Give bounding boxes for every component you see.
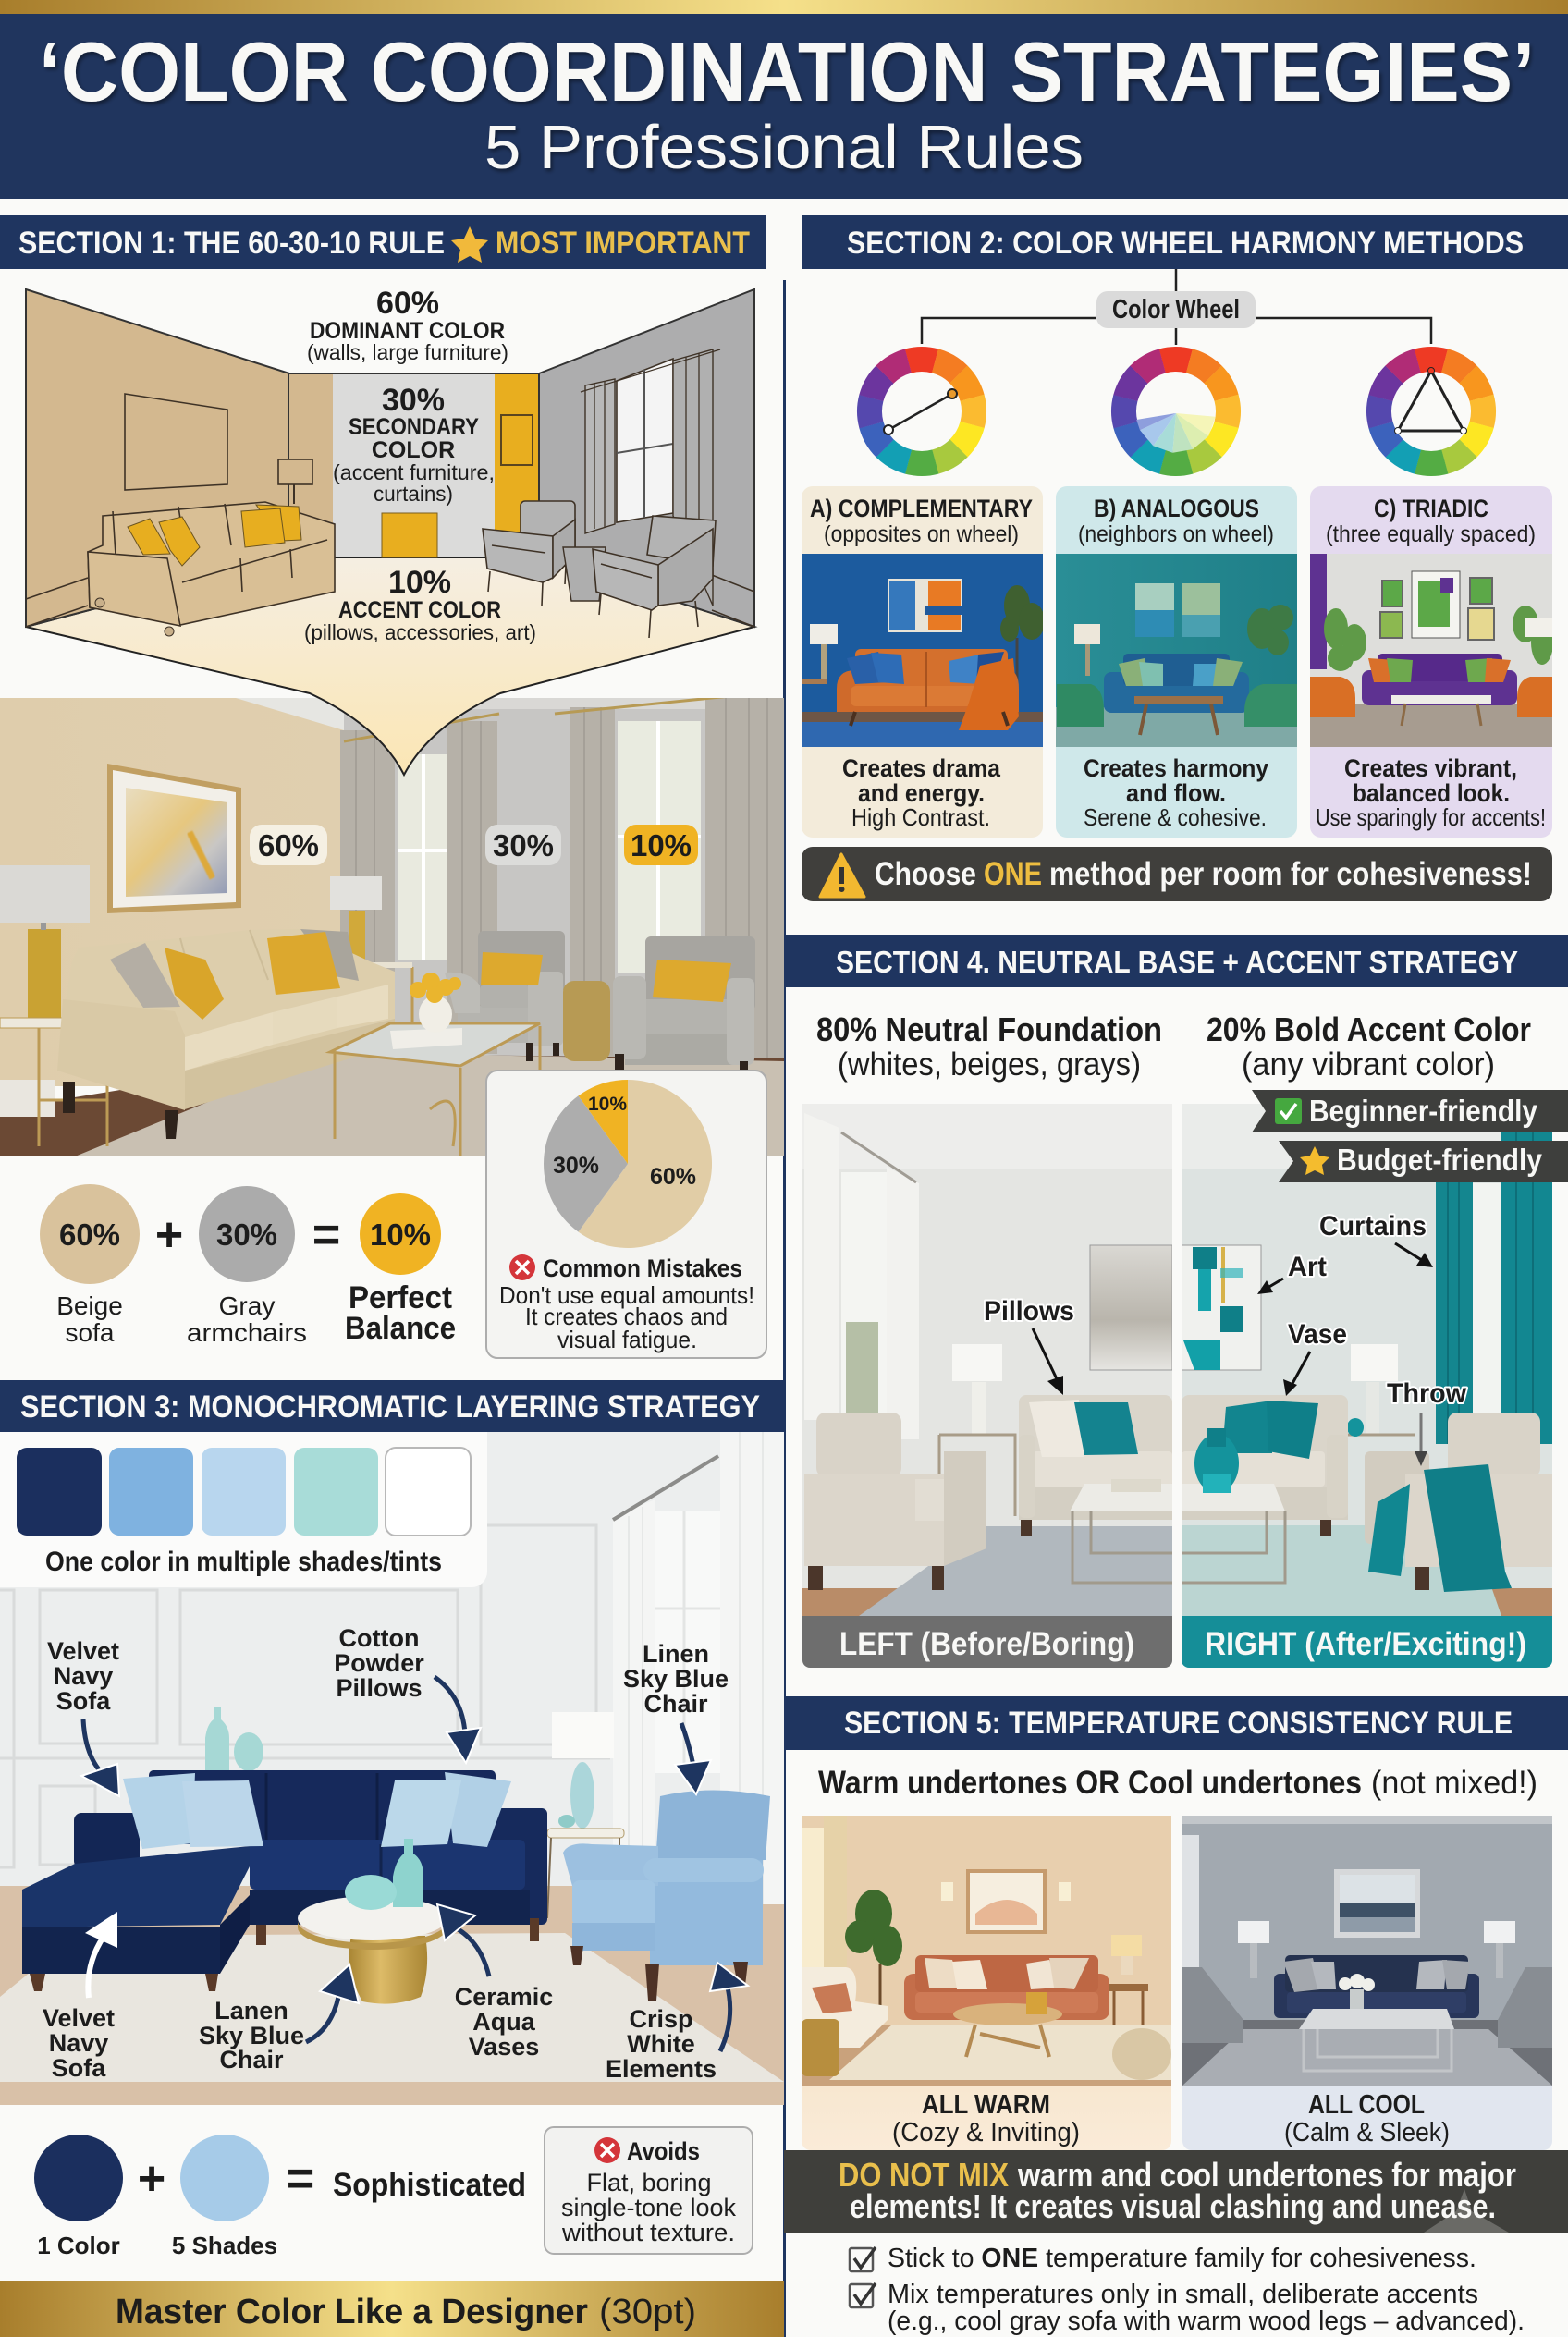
10% text: (pillows, accessories, art) (304, 620, 536, 644)
panel: monochromatic room photo (0, 1432, 784, 2105)
callout labels with arrows: Elements (606, 2055, 717, 2083)
after coffee table (1182, 1484, 1285, 1583)
callout labels with arrows: White (627, 2030, 695, 2058)
photo labels: 10% (631, 828, 692, 863)
photo labels: 30% (493, 828, 554, 863)
text: 80 / 20 split: (whites, beiges, grays) (838, 1046, 1141, 1083)
panel: C triadic: Creates vibrant, (1344, 754, 1517, 782)
color wheel tree (922, 269, 1431, 345)
panel: C triadic (1310, 486, 1553, 838)
panel: all cool (1182, 1816, 1552, 2150)
wall art (107, 764, 241, 913)
callout labels with arrows: Velvet (47, 1637, 119, 1665)
60% text: 60% (376, 286, 439, 321)
equation: one color plus shades: + (138, 2152, 165, 2206)
blue armchair (563, 1790, 770, 2001)
equation: 60 + 30 = 10: Gray (219, 1291, 275, 1320)
panel: A complementary: Creates drama (842, 754, 1001, 782)
panel: all cool: ALL COOL (1308, 2090, 1425, 2120)
text: 80 / 20 split: 20% Bold Accent Color (1207, 1010, 1531, 1048)
line-art armchairs (483, 501, 716, 638)
ribbon: budget-friendly (1279, 1141, 1568, 1182)
callout: avoids (545, 2127, 753, 2254)
line-art window and curtains (581, 349, 720, 606)
30% text: SECONDARY (349, 414, 479, 440)
10% text (304, 565, 536, 644)
checklist (850, 2244, 1525, 2336)
callout: avoids: Avoids (627, 2137, 700, 2165)
text: warm or cool: Warm undertones OR Cool undertones (818, 1765, 1362, 1801)
60% text: DOMINANT COLOR (310, 318, 505, 344)
divider between columns (783, 280, 786, 2337)
panel: swatches: One color in multiple shades/tints (45, 1547, 442, 1577)
10% text: ACCENT COLOR (338, 597, 501, 623)
panel: A complementary: A) COMPLEMENTARY (810, 495, 1033, 522)
callouts: accent labels (1257, 1211, 1467, 1466)
photo: warm room (802, 1816, 1171, 2086)
panel: all warm: (Cozy & Inviting) (892, 2118, 1080, 2147)
equation: 60 + 30 = 10: sofa (66, 1318, 115, 1347)
icon: star (1300, 1146, 1329, 1175)
panel: B analogous (1056, 486, 1297, 838)
equation: 60 + 30 = 10: Perfect (349, 1280, 452, 1315)
ribbon: beginner-friendly (1252, 1090, 1568, 1132)
equation: one color plus shades: Sophisticated (333, 2167, 526, 2203)
equation: one color plus shades: 5 Shades (172, 2232, 277, 2259)
footer banner (0, 2281, 784, 2337)
ribbon: budget-friendly: Budget-friendly (1337, 1143, 1543, 1177)
equation: 60 + 30 = 10: Beige (56, 1291, 123, 1320)
icon: complementary wheel (848, 337, 996, 485)
text: 80 / 20 split: 80% Neutral Foundation (816, 1010, 1162, 1048)
panel: section 5 heading (784, 1696, 1568, 1750)
text: 80 / 20 split: (any vibrant color) (1242, 1046, 1495, 1083)
table lamp (547, 1712, 624, 1918)
photo labels: 60% (258, 828, 319, 863)
panel: section 3 heading (0, 1380, 784, 1432)
callout labels with arrows: Sky Blue (623, 1665, 729, 1693)
footer banner: Master Color Like a Designer (116, 2293, 588, 2331)
callout: pillows: Pillows (984, 1296, 1074, 1327)
panel: section 1 heading: MOST IMPORTANT (496, 226, 750, 261)
before side table lamp (939, 1344, 1015, 1516)
icon: checkbox (850, 2247, 876, 2271)
callout labels with arrows: Lanen (214, 1997, 288, 2025)
callout: pie chart and common mistakes: Don't use equal amounts! (499, 1281, 754, 1309)
equation: one color plus shades: 1 Color (37, 2232, 120, 2259)
callout: avoids: single-tone look (561, 2194, 736, 2221)
pie chart: 10% (588, 1094, 627, 1115)
equation: 60 + 30 = 10: + (155, 1208, 183, 1262)
panel: after photo teal accents: RIGHT (After/Exciting!) (1205, 1626, 1526, 1662)
panel: A complementary: and energy. (858, 779, 985, 807)
coffee table with flowers (330, 973, 540, 1156)
checklist: Mix temperatures only in small, deliberate accents (888, 2280, 1478, 2309)
before coffee table (1070, 1479, 1172, 1583)
icon: warning triangle (820, 854, 864, 897)
panel: B analogous: and flow. (1126, 779, 1226, 807)
callout labels with arrows: Velvet (43, 2004, 115, 2032)
30% text: (accent furniture, (333, 460, 495, 484)
header banner (0, 0, 1568, 199)
panel: swatches (0, 1432, 487, 1587)
30% text: 30% (382, 383, 445, 418)
text: 80 / 20 split (816, 1010, 1531, 1083)
photo: blue wall orange sofa (802, 554, 1045, 747)
callout labels with arrows: Chair (219, 2046, 284, 2074)
icon: triadic wheel (1357, 337, 1505, 485)
callouts: accent labels: Throw (1387, 1378, 1467, 1409)
panel: all cool: (Calm & Sleek) (1284, 2118, 1450, 2147)
navy sectional sofa (22, 1770, 547, 1991)
callout labels with arrows: Chair (643, 1690, 708, 1718)
wall vases (205, 1707, 263, 1771)
after armchair with throw (1365, 1413, 1552, 1592)
panel: section 2 heading (802, 215, 1568, 269)
after lamp and side table (1348, 1344, 1415, 1437)
panel: B analogous: Creates harmony (1084, 754, 1268, 782)
panel: all warm (802, 1816, 1171, 2150)
callout labels with arrows: Ceramic (455, 1983, 553, 2011)
equation: 60 + 30 = 10: = (312, 1208, 340, 1262)
callout: do not mix (784, 2150, 1568, 2233)
10% text: 10% (388, 565, 451, 600)
panel: all warm: ALL WARM (922, 2090, 1050, 2120)
panel: section 1 heading: SECTION 1: THE 60-30-10 RULE (18, 226, 445, 261)
callout labels with arrows: Vases (469, 2033, 539, 2061)
equation: 60 + 30 = 10: 10% (370, 1217, 431, 1252)
lamps (0, 865, 382, 1019)
floor arrow shape (26, 557, 754, 775)
photo labels (250, 825, 698, 865)
callout labels with arrows: Navy (49, 2029, 108, 2057)
icon: star (451, 226, 488, 263)
footer banner: (30pt) (599, 2293, 696, 2331)
panel: after photo teal accents (1182, 1104, 1552, 1668)
panel: C triadic: C) TRIADIC (1374, 495, 1488, 522)
callout: pie chart and common mistakes (486, 1071, 766, 1358)
teal vase (1194, 1428, 1239, 1493)
checklist: (e.g., cool gray sofa with warm wood legs – advanced). (888, 2306, 1525, 2336)
callout labels with arrows: Sky Blue (199, 2022, 304, 2049)
panel: B analogous: Serene & cohesive. (1084, 803, 1267, 831)
callout: pie chart and common mistakes: It creates chaos and (525, 1303, 728, 1330)
photo: teal wall blue sofa (1056, 554, 1297, 747)
callout labels with arrows: Sofa (56, 1687, 111, 1715)
panel: C triadic: balanced look. (1353, 779, 1510, 807)
equation: 60 + 30 = 10: 60% (59, 1217, 120, 1252)
line-art sofa (88, 502, 335, 636)
equation: one color plus shades (34, 2135, 526, 2259)
pie chart: 30% (553, 1153, 599, 1179)
pie chart (544, 1080, 712, 1248)
equation: 60 + 30 = 10: armchairs (187, 1318, 307, 1347)
panel: section 1 photo of living room (0, 695, 784, 1156)
callout: choose one method: ONE (984, 856, 1042, 892)
panel: A complementary: (opposites on wheel) (824, 521, 1019, 547)
icon: red x (594, 2137, 620, 2163)
callout: choose one method (802, 847, 1552, 901)
callout labels with arrows: Pillows (336, 1674, 423, 1702)
photo: purple sofa orange chairs (1310, 554, 1553, 747)
panel: section 4 heading (784, 935, 1568, 987)
panel: C triadic: (three equally spaced) (1326, 521, 1536, 547)
panel: A complementary (802, 486, 1045, 838)
abstract art (1182, 1245, 1261, 1370)
equation: one color plus shades: = (287, 2152, 314, 2206)
subtitle: 5 Professional Rules (484, 113, 1084, 182)
before sofa (1019, 1395, 1172, 1536)
callout labels with arrows: Linen (643, 1640, 709, 1668)
panel: section 3 heading: SECTION 3: MONOCHROMATIC LAYERING STRATEGY (20, 1389, 760, 1425)
callout: choose one method: Choose (875, 856, 976, 892)
icon: analogous wheel (1102, 337, 1250, 485)
callout: avoids: without texture. (561, 2219, 735, 2246)
text: warm or cool: (not mixed!) (1371, 1765, 1537, 1801)
callouts: accent labels: Vase (1288, 1319, 1347, 1350)
30% text: COLOR (372, 437, 455, 463)
60% text (307, 286, 508, 364)
equation: 60 + 30 = 10 (40, 1184, 456, 1347)
callout labels with arrows: Crisp (629, 2005, 693, 2033)
callout: avoids: Flat, boring (586, 2169, 712, 2196)
callout labels with arrows: Navy (54, 1662, 113, 1690)
callout labels with arrows (43, 1624, 748, 2083)
equation: 60 + 30 = 10: 30% (216, 1217, 277, 1252)
panel: section 1 heading (0, 215, 766, 269)
callout labels with arrows: Cotton (339, 1624, 419, 1652)
panel: B analogous: B) ANALOGOUS (1094, 495, 1259, 522)
30% text: curtains) (374, 482, 453, 506)
ribbon: beginner-friendly: Beginner-friendly (1309, 1094, 1538, 1128)
60% text: (walls, large furniture) (307, 340, 508, 364)
panel: before photo neutral room: LEFT (Before/Boring) (839, 1626, 1134, 1662)
round coffee table with vases (298, 1839, 447, 2004)
pie chart: 60% (650, 1164, 696, 1190)
icon: green check (1275, 1098, 1302, 1124)
panel: section 4 heading: SECTION 4. NEUTRAL BASE + ACCENT STRATEGY (836, 945, 1518, 979)
armchairs (445, 931, 755, 1072)
callouts: accent labels: Art (1288, 1252, 1327, 1282)
equation: 60 + 30 = 10: Balance (345, 1311, 456, 1346)
sofa (57, 929, 395, 1139)
panel: before photo neutral room (802, 1104, 1172, 1668)
callout: pie chart and common mistakes: Common Mistakes (543, 1254, 742, 1282)
line-art lamp (278, 459, 312, 504)
callout: do not mix: DO NOT MIX (839, 2156, 1009, 2194)
checklist: Stick to ONE temperature family for cohesiveness. (888, 2244, 1476, 2273)
color wheel tree: Color Wheel (1112, 295, 1240, 324)
panel: A complementary: High Contrast. (851, 803, 990, 831)
panel: B analogous: (neighbors on wheel) (1078, 521, 1274, 547)
after sofa (1182, 1395, 1348, 1536)
callout: pie chart and common mistakes: visual fatigue. (557, 1326, 697, 1353)
callout labels with arrows: Powder (334, 1649, 424, 1677)
callout labels with arrows: Sofa (52, 2054, 106, 2082)
panel: room proportion diagram (26, 286, 754, 775)
30% text (333, 383, 495, 506)
before armchair (804, 1413, 986, 1590)
icon: checkbox (850, 2283, 876, 2307)
photo: cool room (1182, 1816, 1552, 2086)
callouts: accent labels: Curtains (1319, 1211, 1427, 1242)
icon: red x (509, 1254, 535, 1280)
callout labels with arrows: Aqua (472, 2008, 536, 2036)
callout: pillows (984, 1296, 1074, 1395)
